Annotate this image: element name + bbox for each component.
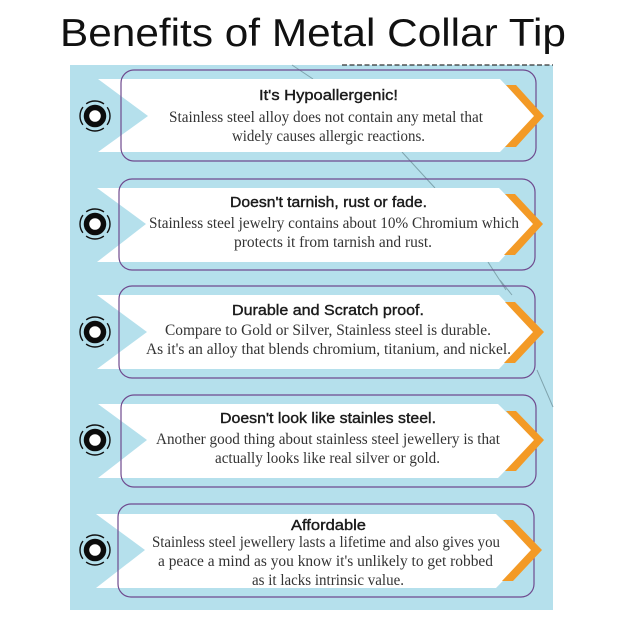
- title: Benefits of Metal Collar Tip: [60, 12, 566, 55]
- frame 5: [118, 504, 534, 597]
- icon: chevron 2: [504, 194, 543, 255]
- body text 1: widely causes allergic reactions.: [232, 128, 425, 145]
- body text 5: Stainless steel jewellery lasts a lifetime and also gives you: [152, 534, 500, 551]
- body text 5: a peace a mind as you know it's unlikely to get robbed: [158, 553, 493, 570]
- heading 5: Affordable: [291, 517, 366, 534]
- panel: benefit 3: [80, 286, 544, 378]
- body text 3: Compare to Gold or Silver, Stainless steel is durable.: [165, 322, 491, 339]
- heading 1: It's Hypoallergenic!: [259, 87, 398, 104]
- banner 1: [98, 79, 535, 152]
- banner 4: [98, 404, 535, 478]
- icon: ring 1: [80, 101, 110, 131]
- heading 4: Doesn't look like stainles steel.: [220, 410, 436, 427]
- panel: benefit 4: [80, 395, 544, 487]
- icon: ring 5: [80, 535, 110, 565]
- heading 3: Durable and Scratch proof.: [232, 302, 424, 319]
- body text 2: protects it from tarnish and rust.: [234, 234, 432, 251]
- icon: chevron 1: [505, 85, 544, 147]
- body text 2: Stainless steel jewelry contains about 10% Chromium which: [149, 215, 519, 232]
- icon: ring 2: [80, 209, 110, 239]
- icon: chevron 5: [502, 520, 542, 581]
- frame 1: [121, 70, 536, 161]
- heading 2: Doesn't tarnish, rust or fade.: [230, 194, 427, 211]
- banner 2: [97, 188, 534, 262]
- body text 3: [146, 322, 511, 358]
- banner 3: [97, 295, 534, 369]
- panel: background: [70, 65, 553, 610]
- body text 2: [149, 215, 519, 251]
- banner 5: [96, 514, 533, 588]
- body text 3: As it's an alloy that blends chromium, titanium, and nickel.: [146, 341, 511, 358]
- body text 4: actually looks like real silver or gold.: [215, 450, 440, 467]
- panel: benefit 5: [80, 504, 542, 597]
- body text 5: [152, 534, 500, 589]
- body text 1: Stainless steel alloy does not contain any metal that: [169, 109, 484, 126]
- icon: chevron 3: [504, 302, 544, 363]
- icon: chevron 4: [505, 411, 544, 471]
- panel: benefit 2: [80, 179, 543, 270]
- body text 1: [169, 109, 484, 145]
- body text 4: Another good thing about stainless steel jewellery is that: [156, 431, 501, 448]
- frame 4: [121, 395, 536, 487]
- icon: ring 3: [80, 317, 110, 347]
- icon: ring 4: [80, 425, 110, 455]
- body text 4: [156, 431, 501, 467]
- frame 3: [119, 286, 535, 378]
- frame 2: [119, 179, 535, 270]
- panel: benefit 1: [80, 70, 544, 161]
- body text 5: as it lacks intrinsic value.: [252, 572, 404, 589]
